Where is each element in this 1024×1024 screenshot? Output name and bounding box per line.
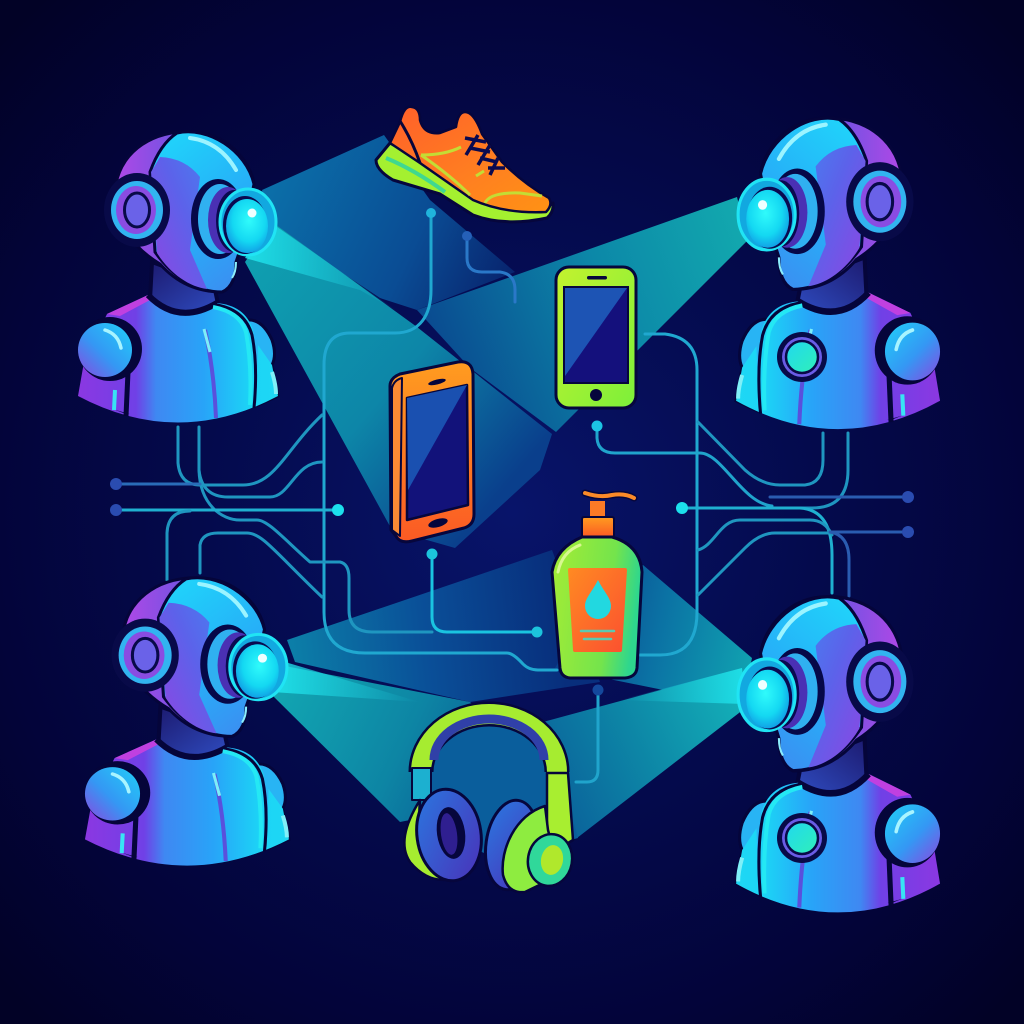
beam: top-right robot to phones <box>417 197 748 432</box>
connector under green phone <box>597 426 772 506</box>
robot: top right <box>736 118 940 429</box>
robot: bottom right <box>736 597 940 912</box>
robot: top left <box>78 132 278 422</box>
light beams <box>245 135 752 860</box>
beam core: top-left <box>245 222 400 313</box>
circuit lines <box>110 208 914 782</box>
product: running shoe <box>376 107 553 222</box>
connector dots <box>110 208 914 696</box>
beam core: bottom-left <box>272 662 420 702</box>
connector to headphones <box>576 690 598 782</box>
connector under orange phone <box>432 554 537 632</box>
product: headphones <box>404 714 576 893</box>
short connector under shoe <box>467 237 515 302</box>
left traces <box>116 415 432 632</box>
beam: bottom-left robot to bottle <box>287 550 600 702</box>
product: soap bottle <box>552 493 642 678</box>
beam overlap behind headphones <box>420 715 578 860</box>
beam: top-left robot to shoe <box>262 135 515 310</box>
right traces <box>682 422 908 596</box>
product: green phone <box>556 267 636 408</box>
beam: top-left robot to orange phone <box>245 222 552 548</box>
beam core: bottom-right <box>620 668 745 704</box>
beam: bottom-left robot to headphones <box>272 665 560 822</box>
central loop lines <box>324 213 697 670</box>
product: orange phone <box>390 362 474 542</box>
beam: bottom-right robot to headphones <box>470 668 748 838</box>
beam: bottom-right robot to bottle <box>555 565 752 706</box>
robot: bottom left <box>85 578 289 866</box>
